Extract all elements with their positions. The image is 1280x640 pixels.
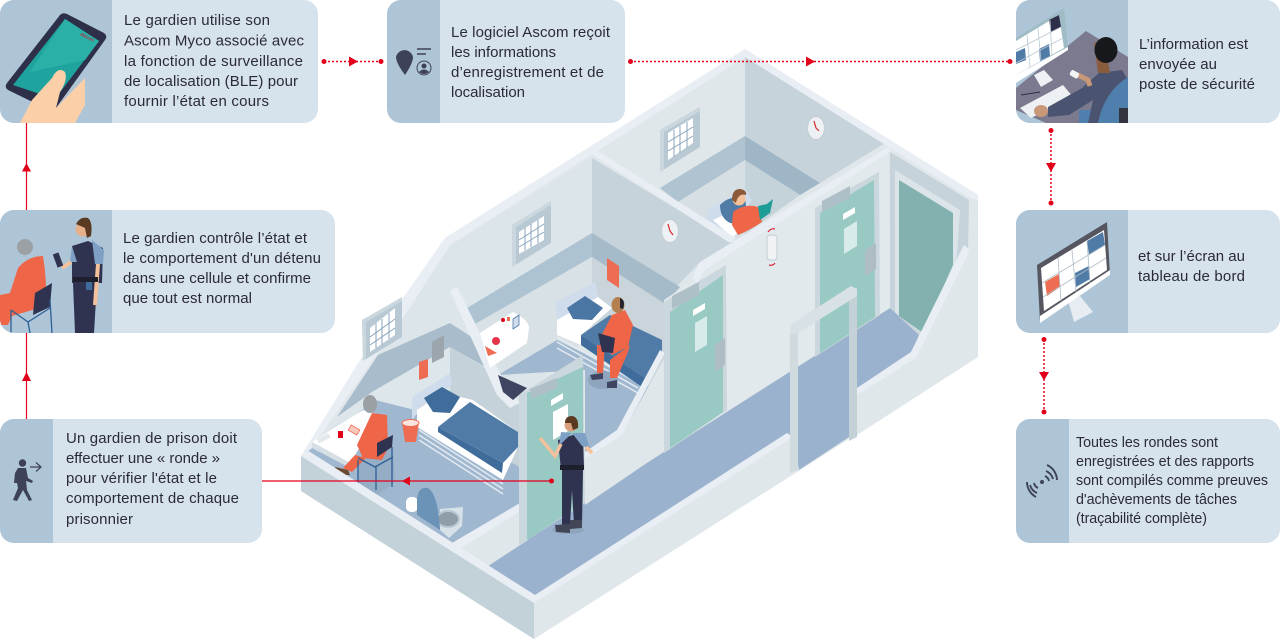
partition strip between cells (450, 287, 519, 408)
panel background (0, 419, 262, 543)
panel: dashboard screen (1016, 210, 1280, 333)
poster: cell 2 (607, 258, 619, 288)
arrow: phone to software (322, 56, 384, 66)
text: tableau de bord (1138, 268, 1245, 285)
text: effectuer une « ronde » (66, 450, 220, 467)
text: le comportement d'un détenu (123, 250, 321, 267)
door 1 (519, 355, 585, 545)
roof trim (301, 49, 978, 456)
arrow: round to guard check (22, 333, 31, 419)
alarm device (767, 229, 777, 265)
low wall left of door 1 (452, 503, 528, 566)
text: Le gardien utilise son (124, 12, 270, 29)
panel: guard checks inmate (0, 210, 335, 333)
text (451, 24, 611, 101)
panel: guard uses Ascom Myco (0, 0, 318, 123)
text: Ascom Myco associé avec (124, 32, 304, 50)
left column (0, 419, 53, 543)
partition strip top cell (590, 150, 736, 243)
panel: security station (1016, 0, 1280, 123)
text (123, 230, 321, 307)
panel: Ascom software (387, 0, 625, 123)
arrow: guard check to phone (22, 123, 31, 210)
text (1138, 248, 1245, 285)
window: cell 1 (362, 297, 402, 361)
text: prisonnier (66, 511, 133, 528)
left column (1016, 210, 1128, 333)
corridor floor (488, 308, 919, 595)
text: d’enregistrement et de (451, 64, 604, 81)
isometric prison cell block (301, 49, 978, 639)
text (1076, 435, 1268, 527)
text: Toutes les rondes sont (1076, 435, 1218, 451)
panel background (0, 0, 318, 123)
text: sont compilés comme preuves (1076, 473, 1268, 489)
desk: cell 2 (480, 312, 529, 368)
text: (traçabilité complète) (1076, 511, 1207, 527)
end door (890, 152, 969, 335)
guard at door (540, 416, 592, 534)
prisoner seated on bed: cell 2 (588, 297, 633, 389)
icon: wireless signal (1027, 465, 1057, 497)
door frame in corridor (790, 286, 857, 473)
text: comportement de chaque (66, 490, 239, 507)
desk: cell 1 (312, 410, 380, 468)
window: cell 2 (512, 201, 551, 267)
arrow: door to round panel (262, 476, 554, 486)
arrow: software to security station (628, 56, 1012, 66)
bed: cell 1 (412, 373, 518, 494)
text: que tout est normal (123, 290, 252, 307)
illustration: phone in hand: ascom (79, 31, 95, 44)
arrow: security station to dashboard (1046, 128, 1056, 206)
text: poste de sécurité (1139, 76, 1255, 93)
bed: cell 2 (555, 282, 662, 393)
panel background (1016, 210, 1280, 333)
panel background (387, 0, 625, 123)
prisoner at desk: cell 1 (335, 395, 395, 495)
clock: top cell (808, 116, 824, 140)
cell 2 wall with clock (467, 158, 733, 400)
panel: reports (1016, 419, 1280, 543)
left column (1016, 419, 1069, 543)
posters: cell 1 (419, 335, 444, 380)
panel background (0, 210, 335, 333)
text: dans une cellule et confirme (123, 270, 311, 287)
text: et sur l’écran au (1138, 248, 1245, 265)
text: localisation (451, 84, 525, 101)
diagonal strip right wall (857, 245, 970, 395)
corridor wall (664, 150, 890, 453)
prisoner reading: top cell (707, 188, 773, 240)
cell 2 floor (498, 340, 668, 458)
outer walls (301, 49, 978, 639)
left column (387, 0, 440, 123)
cell 1 floor (307, 400, 525, 545)
front low wall trim (301, 433, 793, 603)
text: fournir l’état en cours (124, 93, 269, 110)
trash bin (402, 420, 419, 442)
illustration: inmate and guard (0, 210, 112, 333)
text: Un gardien de prison doit (66, 430, 238, 447)
text: Le gardien contrôle l’état et (123, 230, 308, 247)
arrow: dashboard to reports (1039, 337, 1049, 414)
clock: cell 2 (662, 220, 678, 242)
text (124, 12, 304, 110)
text: L’information est (1139, 36, 1249, 53)
text: la fonction de surveillance (124, 53, 303, 70)
low wall between door 1 and door 2 (585, 350, 666, 505)
text: les informations (451, 44, 556, 61)
text (66, 430, 239, 528)
toilet: cell 1 (406, 488, 463, 538)
top cell walls (325, 57, 885, 440)
cell 1 walls (337, 295, 519, 470)
door 2 (664, 265, 727, 453)
icon: location pin and badge (396, 49, 431, 75)
window: top cell (660, 107, 700, 172)
chair: cell 2 (498, 375, 527, 400)
panel background (1016, 0, 1280, 123)
panel background (1016, 419, 1280, 543)
text: de localisation (BLE) pour (124, 73, 298, 90)
illustration: phone in hand (0, 0, 112, 123)
text (1139, 36, 1255, 93)
text: pour vérifier l'état et le (66, 470, 217, 487)
illustration: monitor (1037, 222, 1110, 323)
text: envoyée au (1139, 56, 1217, 73)
corridor top strip (692, 147, 891, 283)
icon: walking person (13, 459, 41, 501)
panel: guard must do a round (0, 419, 262, 543)
text: Le logiciel Ascom reçoit (451, 24, 611, 41)
text: enregistrées et des rapports (1076, 454, 1254, 470)
text: d'achèvements de tâches (1076, 492, 1237, 508)
illustration: operator at desk (1016, 0, 1128, 123)
door 3 (815, 172, 880, 357)
